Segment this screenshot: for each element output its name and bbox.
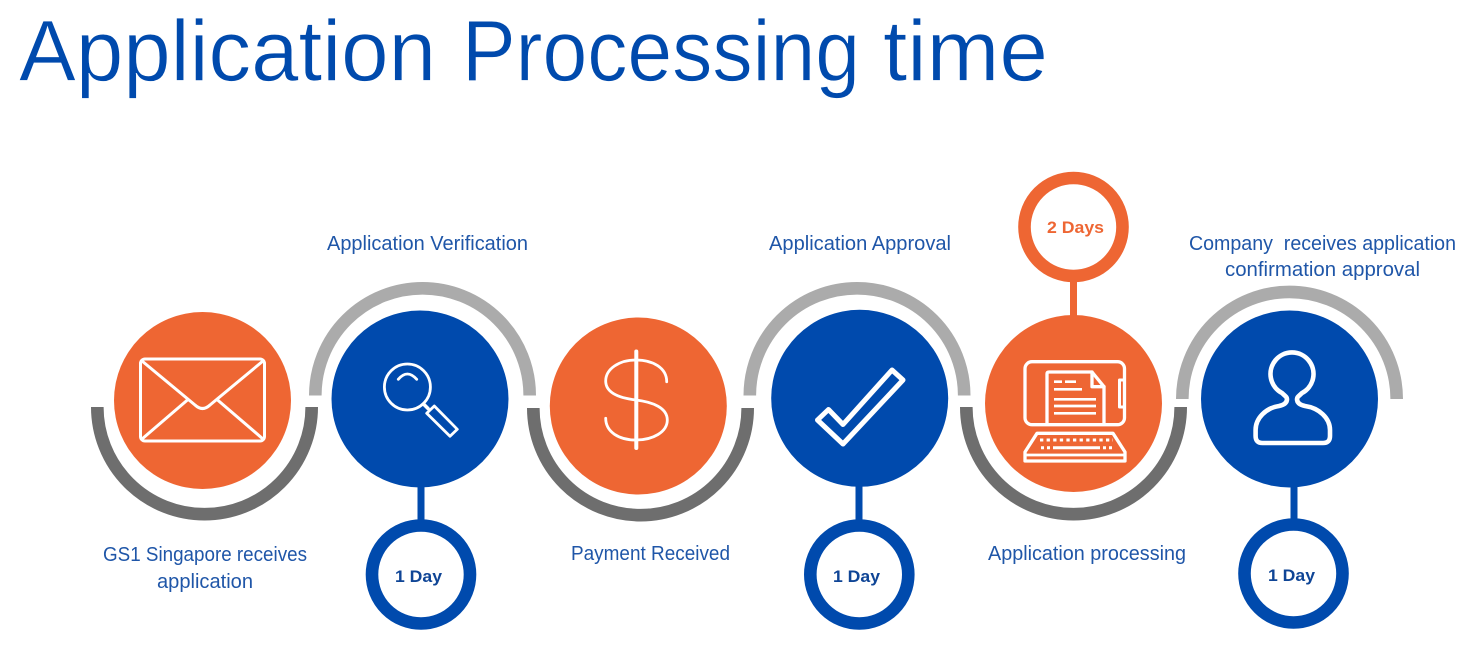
circle: step 3 — [550, 318, 727, 494]
arc: step 4 — [750, 288, 964, 396]
icon: person — [1256, 352, 1330, 443]
icon: envelope — [140, 359, 264, 441]
step 2: Application Verification — [315, 233, 530, 624]
label: step 1: GS1 Singapore receives — [103, 544, 307, 566]
title: Application — [19, 4, 436, 100]
step 4: Application Approval — [750, 233, 964, 624]
circle: step 6 — [1201, 310, 1378, 488]
icon: check mark — [818, 370, 903, 444]
circle: step 1 — [114, 312, 291, 489]
arc: step 5 — [966, 407, 1181, 514]
duration badge: step 2 — [372, 526, 470, 624]
icon: computer with document — [1025, 362, 1125, 461]
step 1: GS1 Singapore receives application — [97, 312, 312, 593]
label: step 2: Application Verification — [327, 233, 528, 255]
duration badge: step 6 — [1244, 524, 1342, 622]
label: step 3: Payment Received — [571, 543, 730, 565]
circle: step 5 — [985, 315, 1162, 492]
connector: step 5 — [1070, 280, 1077, 317]
duration badge: step 6: 1 Day — [1268, 566, 1316, 585]
label: step 6: confirmation approval — [1225, 259, 1420, 281]
arc: step 6 — [1182, 292, 1397, 399]
duration badge: step 5 — [1024, 178, 1122, 276]
label: step 1: application — [157, 571, 253, 593]
connector: step 6 — [1290, 485, 1298, 521]
step 3: Payment Received — [533, 318, 748, 565]
title: Processing — [462, 4, 860, 100]
step 5: Application processing — [966, 178, 1186, 565]
connector: step 4 — [856, 485, 862, 522]
label: step 4: Application Approval — [769, 233, 951, 255]
connector: step 2 — [418, 486, 424, 522]
icon: dollar sign — [606, 352, 667, 448]
circle: step 4 — [771, 310, 948, 487]
circle: step 2 — [332, 310, 508, 488]
duration badge: step 4 — [810, 526, 908, 624]
step 6: Company receives application confirmation approval — [1182, 233, 1456, 622]
duration badge: step 5: 2 Days — [1047, 218, 1104, 237]
arc: step 1 — [97, 407, 312, 514]
label: step 5: Application processing — [988, 543, 1186, 565]
title: time — [883, 4, 1048, 100]
duration badge: step 4: 1 Day — [833, 567, 881, 586]
icon: magnifier — [384, 364, 457, 436]
arc: step 2 — [315, 288, 530, 396]
label: step 6: Company receives application — [1189, 233, 1456, 255]
arc: step 3 — [533, 408, 748, 515]
duration badge: step 2: 1 Day — [395, 567, 443, 586]
